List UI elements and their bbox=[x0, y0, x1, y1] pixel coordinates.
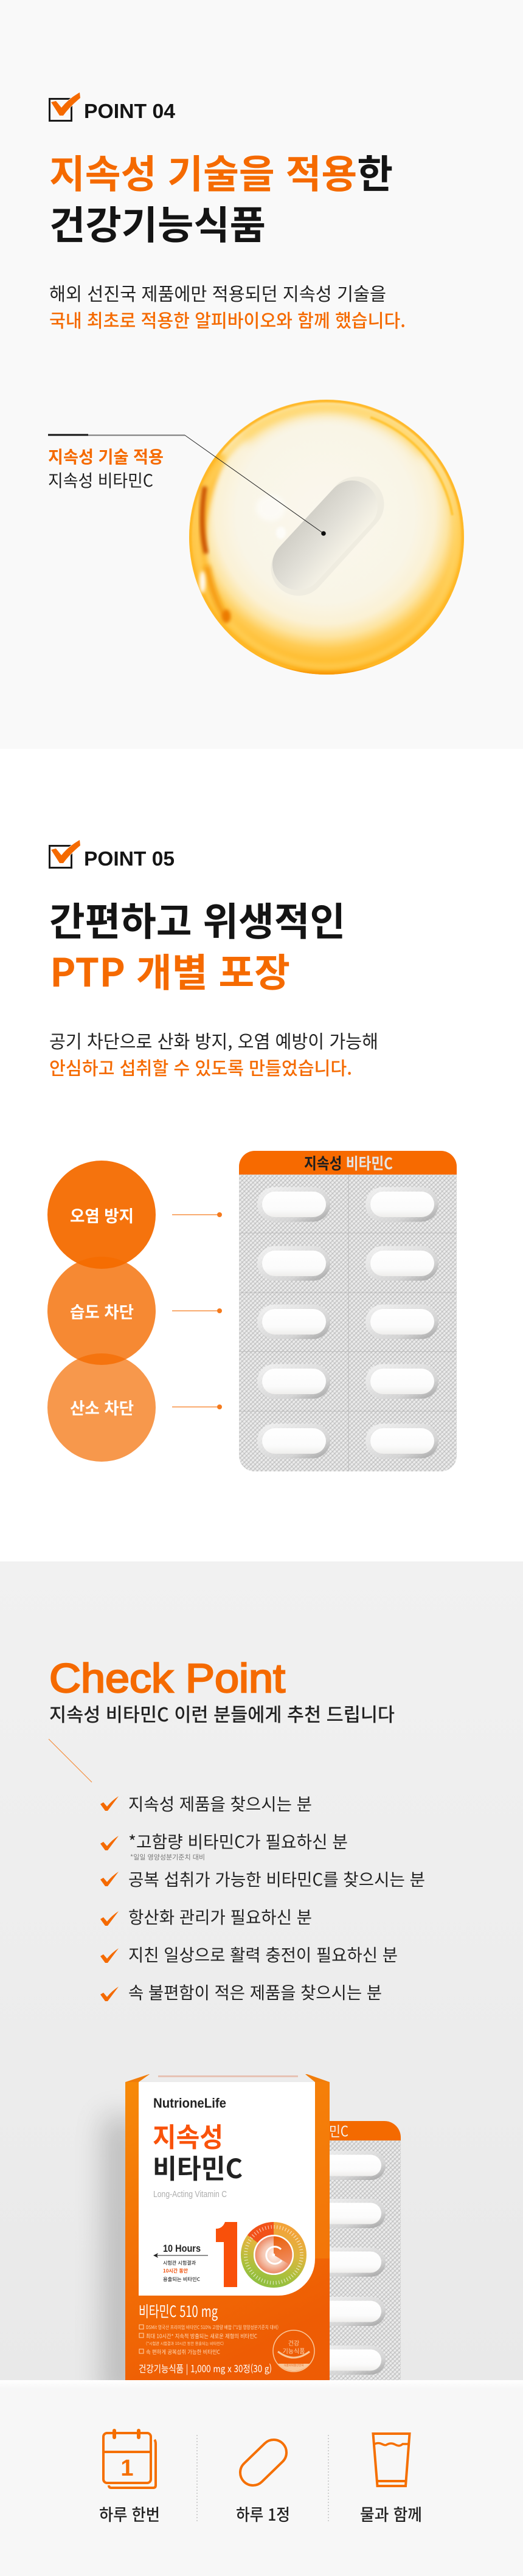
title: point 05: 간편하고 위생적인 bbox=[49, 891, 345, 947]
health food badge: 건강 bbox=[288, 2338, 299, 2347]
big numeral 1 bbox=[216, 2222, 237, 2287]
label: POINT 05: POINT 05 bbox=[84, 847, 175, 870]
diagonal accent bbox=[49, 1739, 92, 1782]
point 04 heading bbox=[50, 92, 176, 122]
title: point 05 bbox=[49, 891, 345, 998]
title: point 05: PTP 개별 포장 bbox=[50, 942, 290, 998]
circle label: 오염 방지: 오염 방지 bbox=[70, 1203, 134, 1227]
health food badge: 기능식품 bbox=[283, 2346, 305, 2355]
text block: point 04 description bbox=[49, 279, 406, 333]
icon: checkbox bbox=[50, 840, 80, 867]
blister label: 지속성 비타민C bbox=[304, 1151, 393, 1174]
icon: tablet bbox=[235, 2434, 292, 2491]
product box: Long-Acting Vitamin C bbox=[153, 2189, 227, 2199]
callout text: 지속성 기술 적용 bbox=[48, 444, 164, 468]
paper fade bbox=[0, 2380, 523, 2389]
box feature list: (*시험관 시험결과 10시간 동안 용출되는 비타민C) bbox=[146, 2340, 224, 2346]
box lid bbox=[125, 2074, 330, 2082]
icon: checkbox bbox=[50, 92, 80, 120]
text block: point 05 description: 공기 차단으로 산화 방지, 오염 예방이 가능해 bbox=[49, 1027, 378, 1054]
product box: 비타민C bbox=[153, 2147, 243, 2186]
icon: glass of water bbox=[373, 2434, 410, 2486]
box feature list: 속 편하게 공복섭취 가능한 비타민C bbox=[146, 2348, 220, 2356]
text block: point 05 description bbox=[49, 1027, 378, 1080]
divider bbox=[196, 2435, 198, 2523]
item 6: 속 불편함이 적은 제품을 찾으시는 분 bbox=[128, 1980, 382, 2004]
ten hours note: 10 Hours bbox=[163, 2243, 201, 2254]
blister behind box: 민C bbox=[329, 2120, 348, 2140]
text block: point 04 description: 국내 최초로 적용한 알피바이오와 함께 했습니다. bbox=[49, 306, 406, 333]
ten hours note: 용출되는 비타민C bbox=[163, 2276, 201, 2283]
item 3: 공복 섭취가 가능한 비타민C를 찾으시는 분 bbox=[128, 1867, 425, 1891]
gauge dial bbox=[246, 2227, 302, 2283]
box face bbox=[125, 2082, 330, 2380]
net weight: 건강기능식품 | 1,000 mg x 30정(30 g) bbox=[139, 2361, 272, 2375]
section background: point 04 bbox=[0, 0, 523, 749]
section background: point 05 bbox=[0, 749, 523, 1561]
blister pack bbox=[239, 1151, 457, 1471]
box feature list bbox=[139, 2324, 279, 2356]
point 05 heading bbox=[50, 840, 175, 870]
text block: point 05 description: 안심하고 섭취할 수 있도록 만들었습니다. bbox=[49, 1054, 352, 1080]
ten hours note bbox=[153, 2243, 208, 2283]
ten hours note: 10시간 동안 bbox=[163, 2267, 188, 2274]
item 2: *일일 영양성분기준치 대비 bbox=[130, 1852, 205, 1862]
label: 하루 한번: 하루 한번 bbox=[99, 2502, 160, 2526]
section background: dosage bbox=[0, 2380, 523, 2576]
item 1: 지속성 제품을 찾으시는 분 bbox=[128, 1791, 312, 1816]
pointer lines bbox=[172, 1212, 222, 1409]
item 5: 지친 일상으로 활력 충전이 필요하신 분 bbox=[128, 1942, 398, 1967]
label: 하루 1정: 하루 1정 bbox=[236, 2502, 290, 2526]
health food badge bbox=[273, 2330, 314, 2372]
text block: point 04 description: 해외 선진국 제품에만 적용되던 지속성 기술을 bbox=[49, 279, 386, 306]
section background: check point bbox=[0, 1561, 523, 2380]
title: point 04 bbox=[49, 144, 393, 251]
label: POINT 04: POINT 04 bbox=[84, 100, 176, 122]
product box bbox=[125, 2074, 330, 2380]
icon: calendar: 1 bbox=[120, 2456, 134, 2481]
health food badge: 식품의약품안전처 bbox=[283, 2363, 304, 2367]
dosage on box: 비타민C 510 mg bbox=[139, 2300, 218, 2322]
blister behind box bbox=[304, 2120, 401, 2380]
box feature list: 최대 10시간* 지속적 방출되는 새로운 제형의 비타민C bbox=[146, 2332, 257, 2340]
brand: NutrioneLife bbox=[153, 2095, 226, 2111]
checklist bbox=[100, 1791, 425, 2004]
item 2: *고함량 비타민C가 필요하신 분 bbox=[128, 1829, 348, 1853]
capsule bbox=[299, 504, 356, 568]
item 4: 항산화 관리가 필요하신 분 bbox=[128, 1904, 312, 1929]
dosage row bbox=[99, 2431, 422, 2526]
box feature list: DSMit 영국산 프리미엄 비타민C 510% 고함량 배합 (*1일 영양성분기준치 대비) bbox=[146, 2324, 279, 2331]
title: point 04: 건강기능식품 bbox=[49, 195, 266, 251]
circle label: 습도 차단: 습도 차단 bbox=[70, 1299, 134, 1323]
illustration: capsule in golden sphere bbox=[189, 400, 464, 675]
circle label: 산소 차단: 산소 차단 bbox=[70, 1395, 134, 1419]
divider bbox=[328, 2435, 329, 2523]
box shadow bbox=[103, 2117, 140, 2403]
benefit circles bbox=[47, 1161, 156, 1462]
callout text: 지속성 비타민C bbox=[48, 468, 153, 492]
product name: 지속성 bbox=[153, 2116, 223, 2154]
heading: Check Point: Check Point bbox=[49, 1656, 285, 1701]
subheading: 지속성 비타민C 이런 분들에게 추천 드립니다 bbox=[49, 1699, 395, 1727]
item 2 bbox=[100, 1829, 348, 1862]
callout line bbox=[48, 434, 326, 536]
icon: calendar bbox=[103, 2431, 156, 2488]
ten hours note: 시험관 시험결과 bbox=[163, 2259, 196, 2266]
title: point 04: 지속성 기술을 적용한 bbox=[49, 144, 393, 200]
label: 물과 함께: 물과 함께 bbox=[360, 2502, 422, 2526]
callout text bbox=[48, 444, 164, 492]
